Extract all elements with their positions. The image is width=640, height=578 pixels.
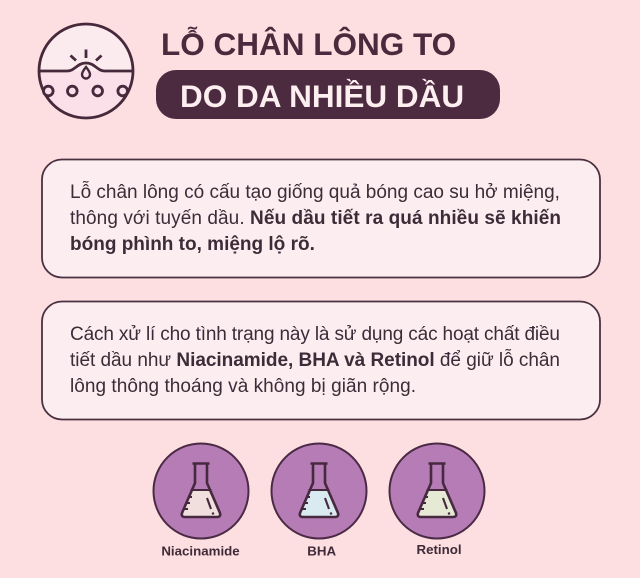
panel: pore explanation xyxy=(42,160,600,278)
text: explanation line 1: Lỗ chân lông có cấu tạo giống quả bóng cao su hở miệng, xyxy=(70,181,560,203)
text: treatment line 3: lông thông thoáng và không bị giãn rộng. xyxy=(70,376,416,397)
icon: skin pore xyxy=(39,24,133,118)
text: treatment line 1: Cách xử lí cho tình trạng này là sử dụng các hoạt chất điều xyxy=(70,324,560,345)
text: explanation line 2: thông với tuyến dầu. Nếu dầu tiết ra quá nhiều sẽ khiến xyxy=(70,208,561,229)
label: BHA: BHA xyxy=(307,544,336,558)
text: explanation line 3: bóng phình to, miệng lộ rõ. xyxy=(70,234,315,255)
label: Retinol: Retinol xyxy=(416,542,462,557)
icon: BHA flask xyxy=(272,444,366,538)
text: treatment line 2: tiết dầu như Niacinamide, BHA và Retinol để giữ lỗ chân xyxy=(70,349,560,371)
icon: Retinol flask xyxy=(390,444,484,538)
icon: Niacinamide flask xyxy=(154,444,248,538)
title: LỖ CHÂN LÔNG TO xyxy=(161,26,456,62)
panel: treatment xyxy=(42,302,600,420)
subtitle pill: DO DA NHIỀU DẦU xyxy=(180,78,464,114)
subtitle pill xyxy=(156,70,500,119)
label: Niacinamide: Niacinamide xyxy=(161,544,240,558)
